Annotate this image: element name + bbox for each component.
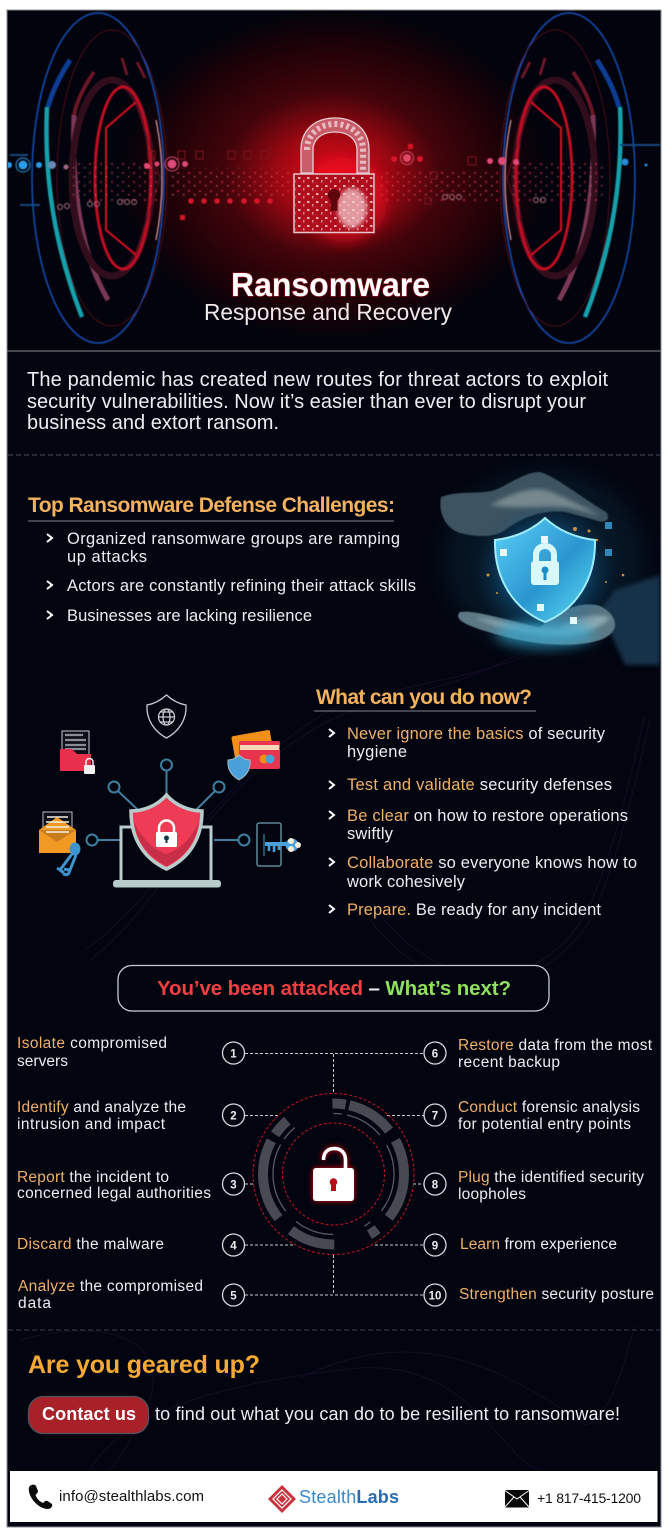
actions list: swiftly: [347, 825, 394, 843]
actions list: Prepare. Be ready for any incident: [347, 901, 601, 919]
intro text: security vulnerabilities. Now it’s easier than ever to disrupt your: [27, 391, 586, 413]
bullet chevrons: [47, 534, 52, 619]
right steps: Conduct forensic analysis: [458, 1099, 640, 1116]
challenges list: [47, 530, 416, 625]
left steps: Report the incident to: [17, 1169, 169, 1186]
intro text: [27, 369, 608, 434]
left steps: Identify and analyze the: [17, 1099, 186, 1116]
icon: globe shield: [147, 695, 186, 738]
icon: envelope with keys: [39, 812, 79, 875]
left steps: intrusion and impact: [17, 1116, 166, 1133]
challenges list: Actors are constantly refining their attack skills: [67, 577, 416, 595]
connector nodes: [86, 760, 250, 846]
footer phone number: +1 817-415-1200: [537, 1490, 641, 1506]
left steps: data: [18, 1295, 51, 1312]
right steps: Plug the identified security: [458, 1169, 644, 1186]
icon: telephone: [29, 1485, 52, 1509]
right steps: loopholes: [458, 1186, 526, 1203]
step numbers: [230, 1048, 441, 1302]
step numbers: 1: [230, 1048, 237, 1060]
dashed connectors: [245, 1054, 424, 1295]
hero title: Ransomware: [231, 266, 430, 303]
right steps: recent backup: [458, 1054, 560, 1071]
right steps: for potential entry points: [458, 1116, 631, 1133]
icon: credit cards with shield: [228, 730, 280, 780]
step numbers: 3: [230, 1180, 237, 1192]
hero rings right: [500, 13, 635, 343]
actions list: Test and validate security defenses: [347, 776, 612, 794]
logo: StealthLabs: [268, 1485, 399, 1513]
step numbers: 2: [230, 1110, 237, 1122]
call to action text: to find out what you can do to be resilient to ransomware!: [155, 1404, 620, 1424]
actions list: Collaborate so everyone knows how to: [347, 854, 637, 872]
step numbers: 9: [432, 1240, 438, 1252]
left steps: Analyze the compromised: [18, 1278, 203, 1295]
icon: phone with key: [257, 823, 301, 866]
icon: envelope: [505, 1490, 529, 1508]
step number badges: [222, 1042, 446, 1306]
icon: folder with lock: [60, 731, 95, 774]
photo: hands protecting shield: [440, 470, 660, 667]
left steps: Discard the malware: [17, 1236, 164, 1253]
step numbers: 7: [432, 1110, 438, 1122]
attacked banner: [118, 966, 549, 1011]
bullet chevrons: [329, 729, 334, 913]
challenges list: Businesses are lacking resilience: [67, 607, 312, 625]
left steps: [17, 1035, 211, 1312]
step numbers: 4: [230, 1240, 237, 1252]
challenges list: Organized ransomware groups are ramping: [67, 530, 400, 548]
actions list: Never ignore the basics of security: [347, 725, 606, 743]
logo: StealthLabs: StealthLabs: [299, 1487, 399, 1507]
actions list: Be clear on how to restore operations: [347, 807, 628, 825]
security illustration: [39, 695, 301, 888]
attacked banner: You’ve been attacked – What’s next?: [157, 977, 511, 1000]
right steps: [458, 1037, 654, 1303]
hero rings left: [32, 13, 167, 343]
challenges list: up attacks: [67, 548, 147, 566]
central lock diagram: [253, 1094, 414, 1254]
step numbers: 10: [429, 1290, 441, 1302]
hero subtitle: Response and Recovery: [204, 299, 452, 325]
intro text: business and extort ransom.: [27, 412, 279, 434]
hero data stream: [6, 144, 660, 220]
left steps: servers: [17, 1053, 68, 1070]
contact button: [28, 1396, 148, 1434]
call to action heading: Are you geared up?: [28, 1351, 260, 1379]
icon: open padlock: [313, 1148, 354, 1201]
footer email: info@stealthlabs.com: [59, 1488, 204, 1505]
right steps: Restore data from the most: [458, 1037, 653, 1054]
footer: [10, 1471, 658, 1522]
left steps: concerned legal authorities: [17, 1185, 211, 1202]
right steps: Strengthen security posture: [459, 1286, 654, 1303]
heading: what can you do now: What can you do now?: [316, 686, 532, 709]
actions list: [329, 725, 637, 919]
red shield with lock: [131, 795, 202, 869]
right steps: Learn from experience: [460, 1236, 617, 1253]
step numbers: 5: [230, 1290, 237, 1302]
hero banner: [6, 10, 660, 351]
laptop: [113, 827, 221, 888]
left steps: Isolate compromised: [17, 1035, 167, 1052]
background waves: [20, 560, 650, 1470]
actions list: work cohesively: [346, 873, 466, 891]
contact button: Contact us: [42, 1404, 136, 1424]
intro text: The pandemic has created new routes for threat actors to exploit: [27, 369, 608, 391]
actions list: hygiene: [347, 743, 407, 761]
hero padlock: [294, 118, 387, 242]
step numbers: 6: [432, 1048, 438, 1060]
gauge segments: [263, 1104, 404, 1244]
heading: defense challenges: Top Ransomware Defense Challenges:: [28, 494, 395, 517]
step numbers: 8: [432, 1180, 439, 1192]
